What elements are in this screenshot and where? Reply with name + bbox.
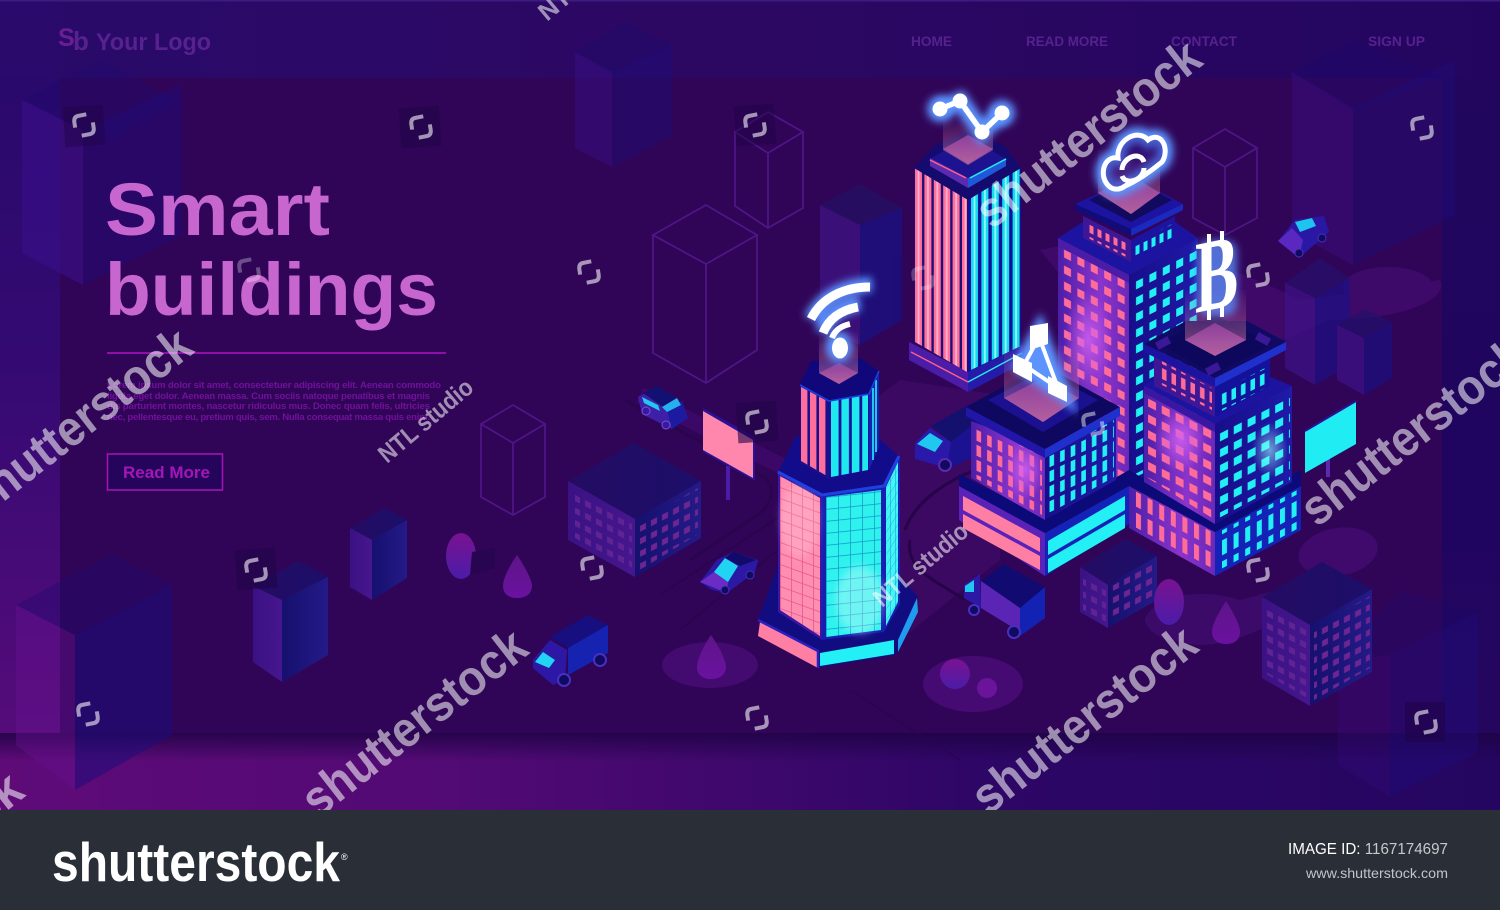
car: upper right (1278, 216, 1329, 258)
navigation: CONTACT (1171, 33, 1237, 49)
body text: nec, pellentesque eu, pretium quis, sem. Nulla consequat massa quis enim. (107, 412, 430, 423)
title: buildings (105, 248, 438, 331)
base plinth (909, 342, 968, 392)
top roof (1144, 321, 1286, 378)
upper pink (800, 385, 829, 479)
footer logo: shutterstock (52, 831, 340, 893)
roof pad (943, 135, 993, 164)
ledge (1129, 470, 1301, 532)
base right (1045, 486, 1129, 576)
main left (1144, 386, 1215, 524)
trees (446, 533, 1240, 698)
watermarks: shutterstock (964, 28, 1212, 239)
tower: striped building with molecule (909, 94, 1025, 392)
body text (107, 380, 441, 423)
pink face (778, 472, 822, 640)
car: lower centre (700, 552, 758, 594)
block: right apartment (1262, 562, 1372, 706)
base (758, 560, 918, 668)
button: read more (108, 454, 222, 490)
tower: hexagonal wifi tower (758, 285, 918, 668)
block: small left (350, 508, 407, 600)
penthouse (1154, 355, 1215, 417)
title: Smart (105, 168, 330, 251)
block: rear left tower (820, 184, 902, 345)
icon: cloud (1103, 135, 1165, 189)
body text: ligula eget dolor. Aenean massa. Cum sociis natoque penatibus et magnis (107, 391, 430, 402)
watermarks: NTL studio (868, 517, 974, 613)
billboard: cyan (1305, 401, 1356, 477)
base left (1129, 486, 1215, 576)
beam (819, 332, 858, 384)
glow on the left face (1064, 290, 1112, 390)
base right (1215, 486, 1301, 576)
roof pad (1004, 378, 1079, 422)
roof (966, 365, 1120, 449)
main right (1045, 413, 1116, 520)
base left (959, 486, 1045, 576)
icon: molecule (927, 94, 1015, 140)
tower: front left building with network icon (915, 323, 1129, 576)
glows (1154, 408, 1206, 472)
top roof (1075, 191, 1183, 229)
glow (1005, 440, 1045, 500)
block: mid left (253, 561, 328, 682)
truck behind building (915, 405, 985, 471)
footer logo: ® (341, 852, 348, 862)
icon: bitcoin: B (1195, 212, 1238, 336)
body text: dis parturient montes, nascetur ridiculus mus. Donec quam felis, ultricies (107, 401, 430, 412)
block: small front (1080, 539, 1157, 628)
right stripes (968, 168, 1021, 372)
roof deck (1058, 222, 1198, 275)
navigation (911, 33, 1425, 49)
wireframe boxes (481, 112, 1257, 515)
roof (914, 130, 1021, 200)
button: read more: Read More (123, 463, 210, 482)
navigation: HOME (911, 33, 952, 49)
car: upper left (638, 386, 688, 429)
dark background blocks (253, 184, 1392, 706)
logo: Your Logo (96, 29, 211, 56)
beam (943, 118, 993, 165)
tower: front right building with bitcoin (1129, 212, 1301, 576)
navigation: READ MORE (1026, 33, 1108, 49)
left face (1058, 238, 1129, 486)
roof pad (1185, 323, 1246, 356)
penthouse (1083, 216, 1131, 262)
beam (1004, 345, 1079, 422)
main left (971, 421, 1045, 520)
upper cyan (829, 394, 869, 479)
ledge (959, 470, 1129, 533)
ground patches and roads (625, 244, 1441, 760)
watermark markers (63, 104, 1445, 742)
watermarks: shutterstock (290, 617, 538, 828)
beam (1098, 150, 1160, 214)
cyan face (822, 486, 884, 640)
divider (107, 352, 446, 354)
tier roof (778, 436, 899, 495)
icon: network (1013, 323, 1067, 402)
icon: wifi (811, 285, 872, 358)
truck: front left (533, 615, 608, 686)
top cap (800, 358, 879, 401)
block: rear right (1285, 258, 1392, 395)
highlights (780, 484, 820, 556)
left stripes (914, 168, 968, 372)
roof pad (819, 363, 858, 384)
navigation: SIGN UP (1368, 33, 1425, 49)
logo: b (73, 26, 89, 56)
upper right (869, 370, 879, 470)
beam (1185, 290, 1246, 355)
watermarks: NTL studio (373, 373, 479, 469)
right cyan face (884, 455, 900, 632)
website: www.shutterstock.com (1305, 865, 1448, 881)
watermarks: shutterstock (960, 614, 1208, 825)
image id: IMAGE ID: 1167174697 (1288, 841, 1448, 858)
roof pad (1098, 175, 1160, 214)
right face (1129, 238, 1198, 486)
logo: S (58, 24, 75, 52)
main right (1215, 386, 1292, 524)
footer (0, 810, 1500, 910)
billboard: pink (703, 408, 755, 500)
body text: Lorem ipsum dolor sit amet, consectetuer adipiscing elit. Aenean commodo (107, 380, 441, 391)
truck: front centre (964, 564, 1045, 638)
tower: tall centre building with cloud (1058, 135, 1198, 486)
deck (1144, 376, 1292, 424)
logo (58, 24, 211, 56)
title (105, 168, 438, 331)
block: wide apartment (568, 443, 701, 577)
